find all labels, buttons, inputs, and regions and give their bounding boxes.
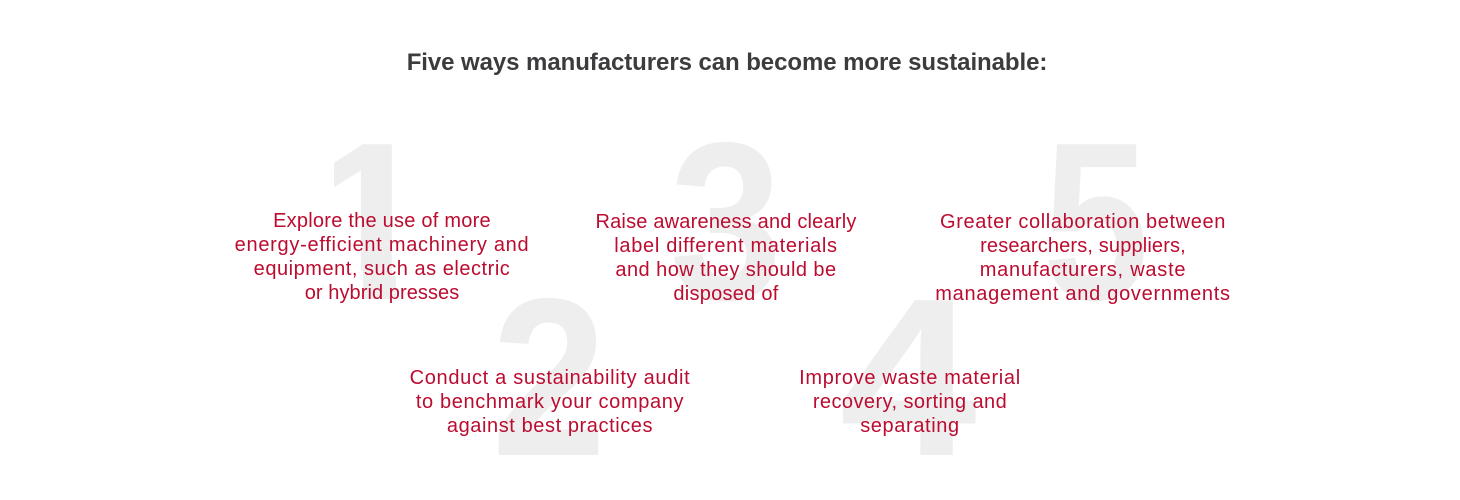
text: way 3: disposed of (673, 283, 779, 305)
text: way 1: Explore the use of more (273, 210, 491, 232)
number 1: 1 (308, 95, 434, 347)
text: way 1: equipment, such as electric (254, 258, 510, 280)
text: way 5: Greater collaboration between (940, 211, 1226, 233)
text: way 2: Conduct a sustainability audit (410, 367, 690, 389)
number 3: 3 (670, 95, 782, 347)
text: way 2: against best practices (447, 415, 653, 437)
text: way 3: label different materials (614, 235, 838, 257)
text: way 1 (235, 210, 529, 304)
text: way 5: researchers, suppliers, (980, 235, 1186, 257)
text: way 4: Improve waste material (799, 367, 1021, 389)
text: way 5 (935, 211, 1231, 305)
number 5: 5 (1043, 95, 1149, 347)
text: way 2 (410, 367, 690, 437)
text: way 4 (799, 367, 1021, 437)
text: way 3: and how they should be (615, 259, 837, 281)
text: way 3 (595, 211, 857, 305)
number 2: 2 (491, 251, 607, 500)
text: way 5: management and governments (935, 283, 1231, 305)
text: way 4: recovery, sorting and (813, 391, 1007, 413)
text: way 5: manufacturers, waste (980, 259, 1186, 281)
text: way 2: to benchmark your company (416, 391, 684, 413)
title: Five ways manufacturers can become more sustainable: (407, 49, 1047, 76)
text: way 4: separating (860, 415, 960, 437)
number 4: 4 (839, 251, 977, 500)
text: way 1: or hybrid presses (305, 282, 459, 304)
text: way 3: Raise awareness and clearly (595, 211, 857, 233)
text: way 1: energy-efficient machinery and (235, 234, 529, 256)
